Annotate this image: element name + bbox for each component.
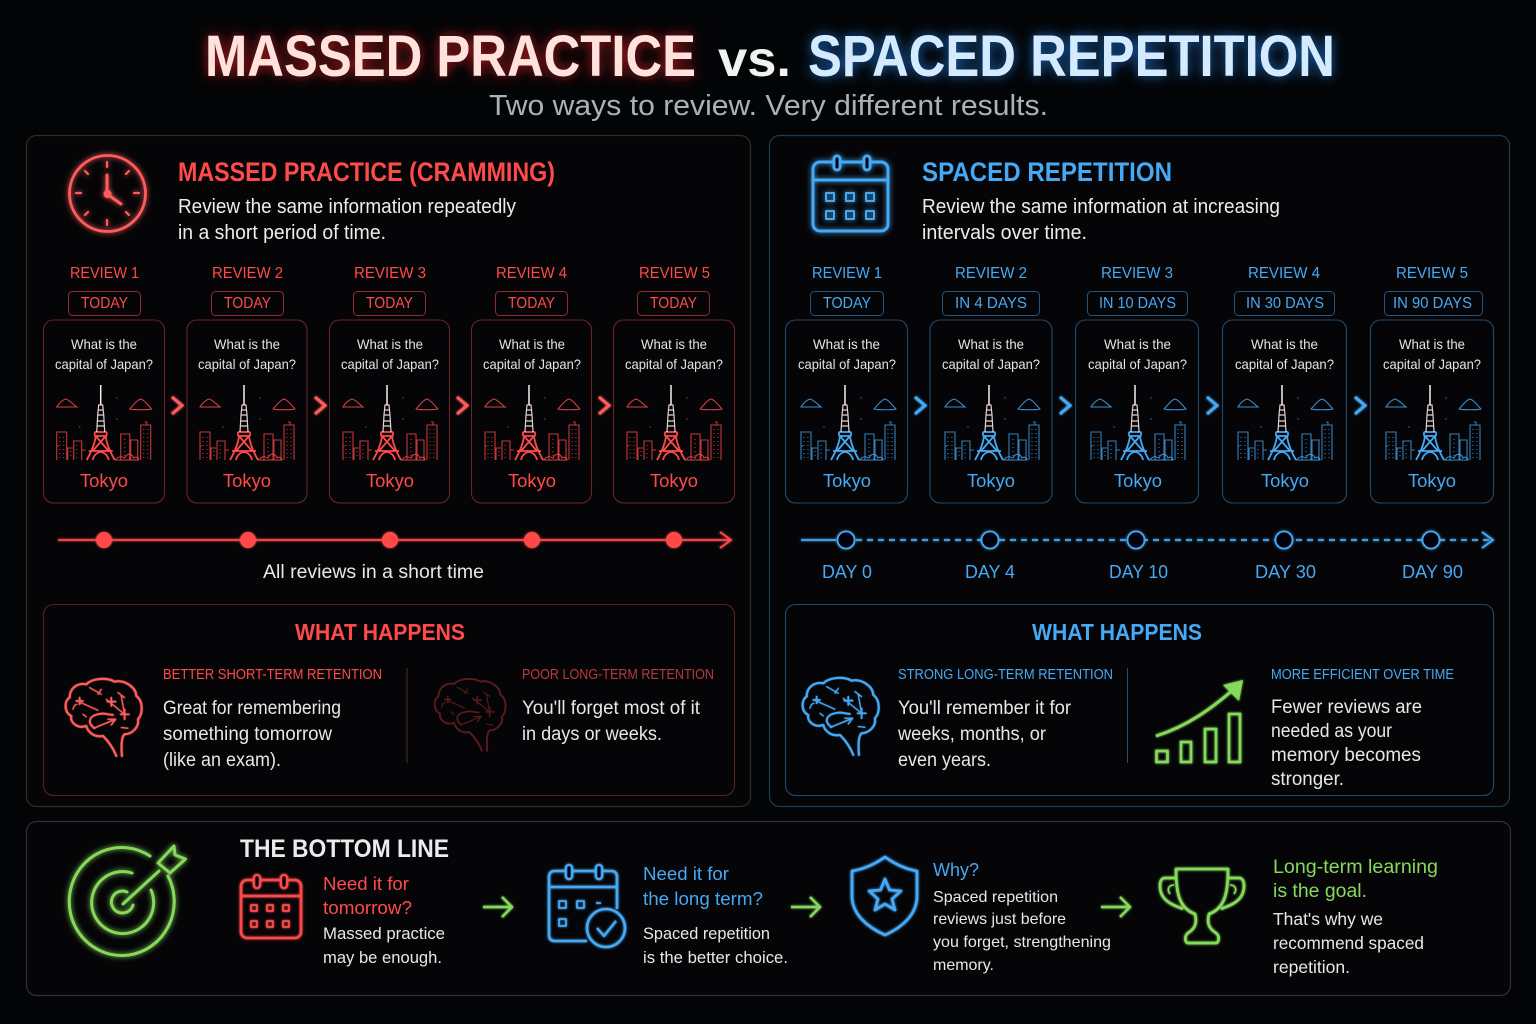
goal text bbox=[1273, 857, 1438, 977]
review 1 card: What is the bbox=[71, 336, 137, 352]
arrow bbox=[791, 897, 820, 917]
review 2 card: What is the bbox=[214, 336, 280, 352]
icon: clock bbox=[70, 156, 146, 232]
strong long-term retention: STRONG LONG-TERM RETENTION bbox=[898, 667, 1113, 683]
review 4 card: What is the bbox=[499, 336, 565, 352]
panel: spaced repetition bbox=[770, 136, 1510, 806]
subtitle: Two ways to review. Very different results. bbox=[489, 90, 1048, 122]
review 1 card bbox=[44, 265, 164, 503]
long term text: Need it for bbox=[643, 863, 729, 884]
review 4 card: IN 30 DAYS bbox=[1246, 295, 1324, 312]
heading: MASSED PRACTICE (CRAMMING) bbox=[178, 157, 555, 187]
icon: trophy bbox=[1160, 869, 1244, 943]
timeline day labels: DAY 4 bbox=[965, 561, 1015, 582]
review 2 card: IN 4 DAYS bbox=[955, 295, 1027, 312]
goal text: is the goal. bbox=[1273, 881, 1367, 902]
timeline: massed bbox=[58, 532, 731, 548]
title: SPACED REPETITION bbox=[808, 24, 1335, 89]
long term text: the long term? bbox=[643, 888, 763, 909]
goal text: Long-term learning bbox=[1273, 857, 1438, 878]
more efficient over time: stronger. bbox=[1271, 769, 1344, 790]
icon: brain bbox=[66, 679, 142, 756]
timeline caption: All reviews in a short time bbox=[263, 562, 484, 583]
timeline day labels: DAY 10 bbox=[1109, 561, 1168, 582]
review 1 card: REVIEW 1 bbox=[70, 265, 139, 282]
better short-term retention bbox=[163, 667, 382, 771]
why text: memory. bbox=[933, 957, 994, 974]
review 3 card: IN 10 DAYS bbox=[1099, 295, 1176, 312]
better short-term retention: Great for remembering bbox=[163, 698, 341, 719]
review 5 card bbox=[614, 265, 734, 503]
poor long-term retention: in days or weeks. bbox=[522, 724, 662, 745]
icon: blue calendar check bbox=[549, 865, 625, 947]
review 3 card bbox=[330, 265, 450, 503]
goal text: repetition. bbox=[1273, 957, 1350, 977]
heading: WHAT HAPPENS bbox=[295, 619, 465, 645]
review 3 card: capital of Japan? bbox=[1088, 356, 1187, 372]
long term text bbox=[643, 863, 788, 967]
timeline: spaced bbox=[801, 532, 1493, 548]
better short-term retention: BETTER SHORT-TERM RETENTION bbox=[163, 667, 382, 683]
review 1 card: TODAY bbox=[81, 295, 128, 312]
heading: SPACED REPETITION bbox=[922, 157, 1172, 187]
review 4 card: Tokyo bbox=[1261, 471, 1309, 491]
more efficient over time: memory becomes bbox=[1271, 745, 1421, 766]
description: intervals over time. bbox=[922, 222, 1087, 244]
review 5 card: REVIEW 5 bbox=[639, 265, 710, 282]
icon: calendar bbox=[813, 156, 888, 231]
review 5 card bbox=[1370, 265, 1494, 503]
review 5 card: IN 90 DAYS bbox=[1393, 295, 1472, 312]
review 3 card: Tokyo bbox=[1114, 471, 1162, 491]
review 5 card: Tokyo bbox=[650, 471, 698, 491]
review 4 card: REVIEW 4 bbox=[1248, 265, 1320, 282]
more efficient over time bbox=[1271, 667, 1454, 790]
review 3 card bbox=[1076, 265, 1198, 503]
review 1 card: Tokyo bbox=[823, 471, 871, 491]
review 1 card bbox=[786, 265, 908, 503]
arrow bbox=[599, 397, 609, 414]
why text: Spaced repetition bbox=[933, 889, 1058, 906]
icon: red calendar bbox=[241, 875, 301, 938]
review 5 card: REVIEW 5 bbox=[1396, 265, 1468, 282]
review 5 card: Tokyo bbox=[1408, 471, 1456, 491]
description: in a short period of time. bbox=[178, 222, 386, 244]
poor long-term retention: You'll forget most of it bbox=[522, 698, 701, 719]
review 5 card: What is the bbox=[641, 336, 707, 352]
review 1 card: What is the bbox=[813, 336, 880, 352]
review 4 card bbox=[472, 265, 592, 503]
heading: THE BOTTOM LINE bbox=[240, 835, 449, 863]
icon: brain bbox=[803, 678, 879, 755]
description bbox=[922, 196, 1280, 244]
why text: Why? bbox=[933, 859, 979, 880]
arrow bbox=[1060, 397, 1070, 414]
timeline day labels bbox=[822, 561, 1463, 582]
review 5 card: TODAY bbox=[650, 295, 697, 312]
title: MASSED PRACTICE bbox=[205, 24, 696, 89]
tomorrow text: tomorrow? bbox=[323, 897, 412, 918]
timeline day labels: DAY 30 bbox=[1255, 561, 1316, 582]
panel: what happens spaced bbox=[786, 604, 1494, 796]
review 2 card: REVIEW 2 bbox=[955, 265, 1027, 282]
review 4 card: REVIEW 4 bbox=[496, 265, 567, 282]
review 3 card: capital of Japan? bbox=[341, 356, 439, 372]
icon: growth chart bbox=[1156, 680, 1243, 762]
strong long-term retention: weeks, months, or bbox=[897, 724, 1047, 745]
arrow bbox=[1207, 397, 1217, 414]
poor long-term retention: POOR LONG-TERM RETENTION bbox=[522, 667, 714, 683]
review 3 card: REVIEW 3 bbox=[354, 265, 426, 282]
heading: WHAT HAPPENS bbox=[1032, 619, 1202, 645]
timeline day labels: DAY 0 bbox=[822, 561, 872, 582]
title bbox=[205, 24, 1335, 89]
review 2 card bbox=[930, 265, 1052, 503]
goal text: recommend spaced bbox=[1273, 933, 1424, 953]
review 4 card: What is the bbox=[1251, 336, 1318, 352]
icon: dim brain bbox=[435, 679, 506, 751]
review 3 card: What is the bbox=[357, 336, 423, 352]
review 1 card: Tokyo bbox=[80, 471, 128, 491]
review 4 card: capital of Japan? bbox=[1235, 356, 1334, 372]
arrow bbox=[1355, 397, 1365, 414]
icon: shield star bbox=[852, 857, 917, 935]
poor long-term retention bbox=[522, 667, 714, 745]
review 1 card: capital of Japan? bbox=[55, 356, 153, 372]
review 1 card: REVIEW 1 bbox=[812, 265, 882, 282]
arrow bbox=[172, 397, 182, 414]
strong long-term retention bbox=[897, 667, 1113, 771]
tomorrow text bbox=[323, 873, 445, 967]
review 1 card: capital of Japan? bbox=[798, 356, 896, 372]
tomorrow text: may be enough. bbox=[323, 949, 442, 967]
more efficient over time: needed as your bbox=[1271, 721, 1393, 742]
long term text: is the better choice. bbox=[643, 949, 788, 967]
why text: you forget, strengthening bbox=[933, 934, 1111, 951]
review 4 card: capital of Japan? bbox=[483, 356, 581, 372]
review 1 card: TODAY bbox=[823, 295, 871, 312]
review 4 card: TODAY bbox=[508, 295, 555, 312]
strong long-term retention: You'll remember it for bbox=[898, 698, 1072, 719]
why text bbox=[933, 859, 1111, 974]
goal text: That's why we bbox=[1273, 909, 1383, 929]
more efficient over time: MORE EFFICIENT OVER TIME bbox=[1271, 667, 1454, 683]
title: vs. bbox=[718, 31, 791, 87]
review 2 card: capital of Japan? bbox=[198, 356, 296, 372]
long term text: Spaced repetition bbox=[643, 925, 770, 943]
icon: target bbox=[69, 846, 186, 955]
review 3 card: Tokyo bbox=[366, 471, 414, 491]
review 2 card: REVIEW 2 bbox=[212, 265, 283, 282]
better short-term retention: (like an exam). bbox=[163, 750, 281, 771]
arrow bbox=[315, 397, 325, 414]
review 4 card: Tokyo bbox=[508, 471, 556, 491]
review 5 card: capital of Japan? bbox=[625, 356, 723, 372]
panel: massed practice bbox=[26, 136, 750, 806]
panel: what happens massed bbox=[44, 604, 734, 796]
review 2 card: What is the bbox=[958, 336, 1024, 352]
tomorrow text: Massed practice bbox=[323, 925, 445, 943]
arrow bbox=[483, 897, 512, 917]
review 2 card: TODAY bbox=[224, 295, 271, 312]
arrow bbox=[457, 397, 467, 414]
review 3 card: TODAY bbox=[366, 295, 413, 312]
arrow bbox=[1101, 897, 1130, 917]
review 4 card bbox=[1222, 265, 1346, 503]
description bbox=[178, 196, 516, 244]
why text: reviews just before bbox=[933, 911, 1066, 928]
review 3 card: What is the bbox=[1104, 336, 1171, 352]
review 5 card: capital of Japan? bbox=[1383, 356, 1481, 372]
arrow bbox=[915, 397, 925, 414]
review 5 card: What is the bbox=[1399, 336, 1465, 352]
review 2 card: Tokyo bbox=[223, 471, 271, 491]
description: Review the same information repeatedly bbox=[178, 196, 516, 218]
better short-term retention: something tomorrow bbox=[163, 724, 332, 745]
review 2 card: capital of Japan? bbox=[942, 356, 1040, 372]
panel: the bottom line bbox=[26, 822, 1510, 996]
description: Review the same information at increasing bbox=[922, 196, 1280, 218]
review 3 card: REVIEW 3 bbox=[1101, 265, 1173, 282]
more efficient over time: Fewer reviews are bbox=[1271, 697, 1422, 718]
strong long-term retention: even years. bbox=[898, 750, 991, 771]
review 2 card bbox=[187, 265, 307, 503]
tomorrow text: Need it for bbox=[323, 873, 409, 894]
review 2 card: Tokyo bbox=[967, 471, 1015, 491]
timeline day labels: DAY 90 bbox=[1402, 561, 1463, 582]
